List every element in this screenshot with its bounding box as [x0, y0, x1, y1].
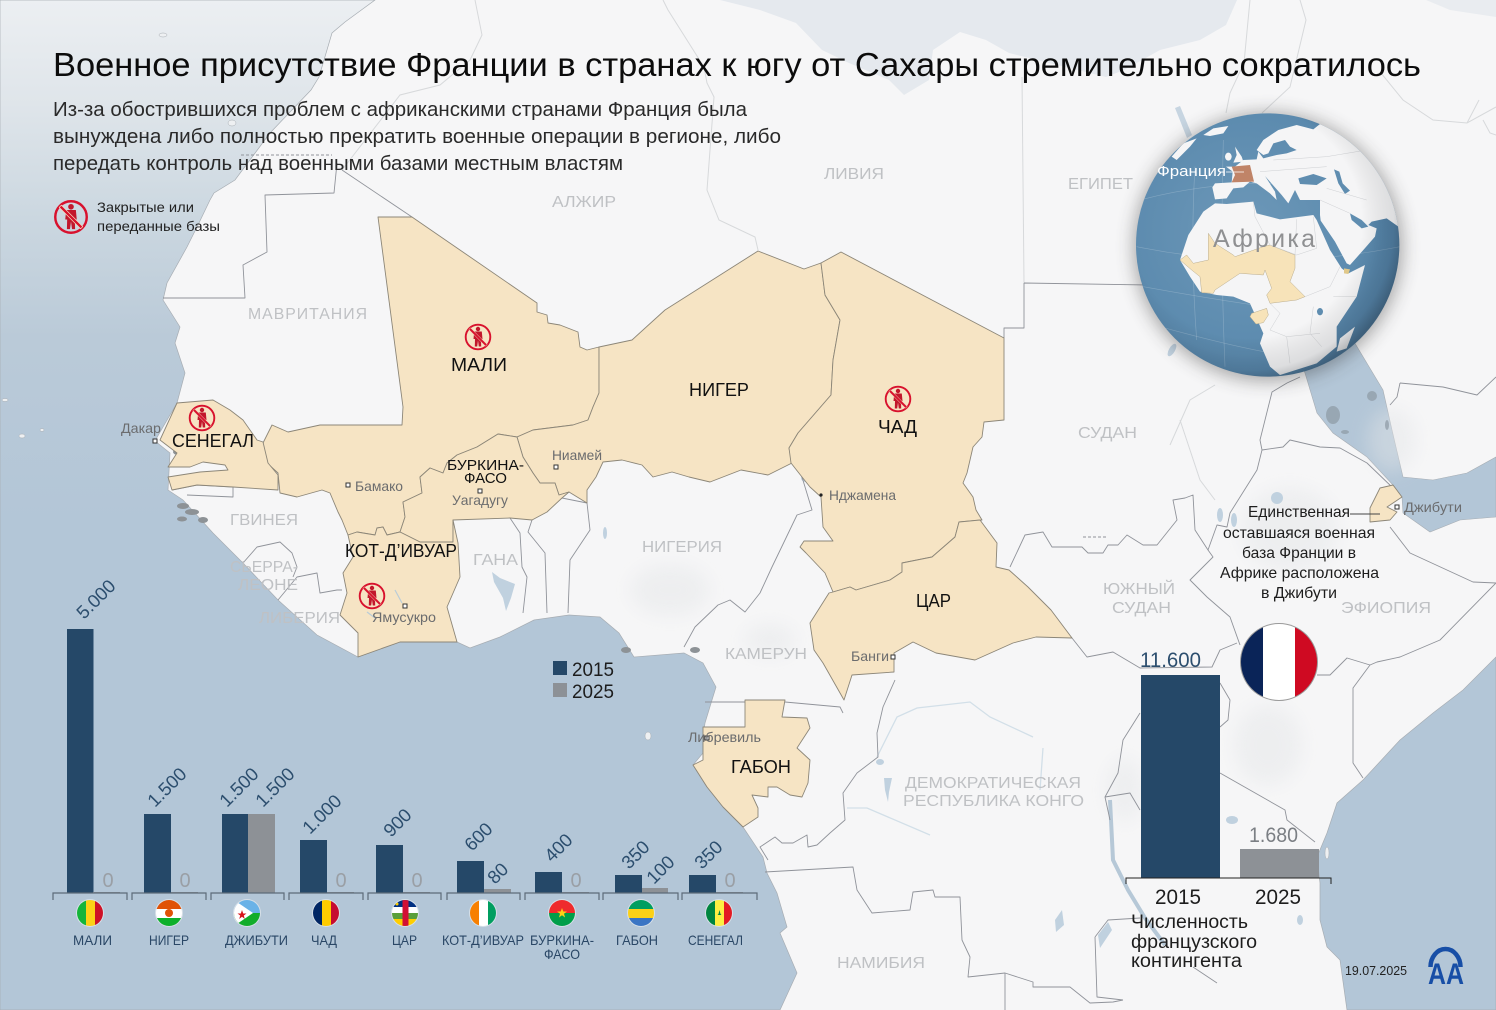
flag: Chad [313, 900, 339, 926]
country names: БУРКИНА- [530, 932, 594, 948]
country labels: МАВРИТАНИЯ [248, 306, 368, 323]
country names: ЦАР [392, 932, 417, 948]
capitals: Либревиль [688, 729, 761, 745]
faint northern borders [342, 0, 1496, 500]
bars 2025 [93, 814, 743, 893]
sea: Atlantic and Gulf of Guinea [0, 0, 797, 1010]
icon: French flag [1240, 623, 1318, 701]
zero labels: 0 [179, 870, 191, 892]
highlighted country names: СЕНЕГАЛ [172, 431, 254, 451]
value labels: 5.000 [72, 575, 120, 623]
country labels: СЬЕРРА- [230, 559, 298, 576]
country labels: ДЕМОКРАТИЧЕСКАЯ [905, 775, 1081, 792]
country labels: ЕГИПЕТ [1068, 176, 1133, 193]
value labels: 1.500 [215, 763, 263, 811]
country names: ГАБОН [616, 932, 658, 948]
flag: Djibouti [234, 900, 260, 926]
sea: Mediterranean [720, 0, 1237, 95]
logo: Anadolu Agency [1428, 949, 1464, 991]
islands [2, 33, 1329, 859]
legend: years: 2015 [572, 660, 614, 681]
note: Djibouti [1220, 504, 1380, 602]
capitals: Банги [851, 648, 889, 664]
highlighted country names: ГАБОН [731, 757, 791, 777]
sea: Indian Ocean [1317, 657, 1496, 1010]
value labels: 900 [379, 804, 416, 841]
highlighted countries on globe [1180, 233, 1305, 303]
country names: СЕНЕГАЛ [688, 932, 743, 948]
highlighted country names: ЧАД [878, 417, 917, 437]
country labels: СУДАН [1078, 425, 1137, 442]
Africa [1180, 202, 1365, 375]
country labels: РЕСПУБЛИКА КОНГО [903, 793, 1084, 810]
islands [1172, 126, 1355, 352]
Eurasia and Arabia [1212, 124, 1398, 265]
country labels: АЛЖИР [552, 194, 616, 211]
label: Africa on globe: Африка [1213, 225, 1315, 253]
country labels: ЛЕОНЕ [238, 577, 298, 594]
capitals: Ямусукро [372, 609, 436, 625]
value labels: 400 [540, 829, 577, 866]
country labels: ЛИВИЯ [824, 166, 884, 183]
highlighted country names: МАЛИ [451, 355, 507, 375]
flag: Côte d'Ivoire [470, 900, 496, 926]
Red Sea islands [1326, 391, 1389, 434]
bar chart: troops by country [53, 575, 757, 962]
country: Djibouti [1370, 485, 1402, 522]
country names: ДЖИБУТИ [225, 932, 288, 948]
subtitle [53, 99, 781, 175]
zero labels: 0 [570, 870, 582, 892]
globe borders [1253, 150, 1367, 363]
highlighted country names [172, 355, 951, 777]
country: Côte d'Ivoire [340, 520, 460, 657]
inland seas [1298, 169, 1368, 315]
capitals [121, 420, 1462, 745]
capitals: Джибути [1404, 499, 1462, 515]
zero labels: 0 [411, 870, 423, 892]
lake Tanganyika and rivers [847, 702, 1165, 945]
country labels: ЛИБЕРИЯ [259, 610, 340, 627]
value labels: 1.500 [143, 763, 191, 811]
date: 19.07.2025 [1345, 963, 1407, 978]
icons: closed bases [190, 325, 910, 608]
zero labels: 0 [335, 870, 347, 892]
legend: years: 2025 [572, 682, 614, 703]
subtitle: вынуждена либо полностью прекратить военные операции в регионе, либо [53, 126, 781, 148]
zero labels: 0 [724, 870, 736, 892]
bars 2015 [67, 629, 716, 893]
country labels: КАМЕРУН [725, 646, 807, 663]
highlighted country names: ЦАР [916, 591, 951, 611]
value labels: 1.000 [298, 790, 346, 838]
country: Gabon [693, 700, 810, 827]
flag: Gabon [628, 900, 654, 926]
highlighted country names: КОТ-Д’ИВУАР [345, 541, 457, 561]
brackets [53, 893, 757, 900]
country names: ФАСО [544, 946, 580, 962]
value labels: 100 [642, 851, 679, 888]
chart caption: французского [1131, 932, 1257, 953]
flag: Niger [156, 900, 182, 926]
value labels: 600 [460, 818, 497, 855]
country names: МАЛИ [73, 932, 112, 948]
note: Djibouti: база Франции в [1242, 545, 1356, 562]
capitals: Ниамей [552, 447, 602, 463]
sea: Red Sea and Gulf of Aden [1300, 340, 1496, 532]
flag: Burkina Faso [549, 900, 575, 926]
note: Djibouti: в Джибути [1261, 585, 1337, 602]
subtitle: Из-за обострившихся проблем с африканскими странами Франция была [53, 99, 748, 121]
note: Djibouti: оставшаяся военная [1223, 525, 1375, 542]
flag: CAR [392, 900, 418, 926]
country labels: ГАНА [473, 552, 518, 569]
value labels [72, 575, 727, 888]
label: France on globe: Франция [1157, 163, 1226, 180]
flags [76, 899, 733, 927]
country: Burkina Faso [400, 434, 569, 542]
logo: Anadolu Agency: AA [1428, 958, 1464, 991]
title: Военное присутствие Франции в странах к югу от Сахары стремительно сократилось [53, 46, 1421, 83]
country labels: ЮЖНЫЙ [1103, 579, 1175, 598]
bar chart: French contingent total [1126, 649, 1331, 909]
note: Djibouti: Единственная [1248, 504, 1350, 521]
legend: closed bases: переданные базы [97, 218, 220, 234]
capitals: Нджамена [829, 487, 896, 503]
bar chart: French contingent total: 2015 [1155, 886, 1201, 909]
country: Senegal [160, 400, 278, 490]
panel: highlighted countries [160, 217, 1402, 827]
country names: НИГЕР [149, 932, 189, 948]
country labels: ГВИНЕЯ [230, 512, 298, 529]
value labels: 1.500 [251, 763, 299, 811]
zero labels [102, 870, 736, 892]
flag: Senegal [706, 900, 732, 926]
bar chart: French contingent total: 1.680 [1249, 824, 1298, 847]
chart caption: контингента [1131, 951, 1242, 972]
flag: Mali [77, 900, 103, 926]
lakes [492, 342, 1303, 948]
legend: closed bases [55, 199, 220, 234]
country labels: ЭФИОПИЯ [1341, 600, 1431, 617]
coastal islands [173, 449, 700, 653]
subtitle: передать контроль над военными базами местным властям [53, 153, 623, 175]
value labels: 350 [617, 836, 654, 873]
legend: closed bases: Закрытые или [97, 199, 194, 215]
France [1232, 165, 1254, 182]
bar chart: French contingent total: 2025 [1255, 886, 1301, 909]
country: Chad [789, 252, 1004, 592]
zero labels: 0 [102, 870, 114, 892]
highlighted country names: НИГЕР [689, 380, 749, 400]
terrain shading [630, 408, 1416, 822]
capitals: Уагадугу [452, 492, 508, 508]
country borders [163, 155, 1496, 1010]
chart caption [1131, 912, 1257, 972]
bar chart: French contingent total: 11.600 [1140, 649, 1201, 672]
country names: ЧАД [311, 932, 337, 948]
note: Djibouti: Африке расположена [1220, 565, 1379, 582]
Lake Kossou tints [367, 590, 402, 618]
sea: Gulf of Suez [1175, 106, 1192, 138]
highlighted country names: ФАСО [464, 470, 507, 487]
country: Central African Republic [810, 520, 1072, 700]
chart caption: Численность [1131, 912, 1248, 933]
country: Niger [517, 251, 840, 503]
value labels: 350 [690, 836, 727, 873]
country names: КОТ-Д’ИВУАР [442, 932, 524, 948]
legend: years [553, 660, 614, 703]
value labels: 80 [483, 858, 512, 888]
highlighted country names: БУРКИНА- [447, 457, 524, 474]
capitals: Дакар [121, 420, 161, 436]
country: Mali [263, 217, 599, 535]
country labels: НАМИБИЯ [837, 955, 925, 972]
graticule [1137, 140, 1400, 367]
country labels: СУДАН [1112, 600, 1171, 617]
country names [73, 932, 743, 962]
globe [1130, 107, 1417, 383]
country labels [230, 166, 1431, 972]
country labels: НИГЕРИЯ [642, 539, 722, 556]
capitals: Бамако [355, 478, 403, 494]
